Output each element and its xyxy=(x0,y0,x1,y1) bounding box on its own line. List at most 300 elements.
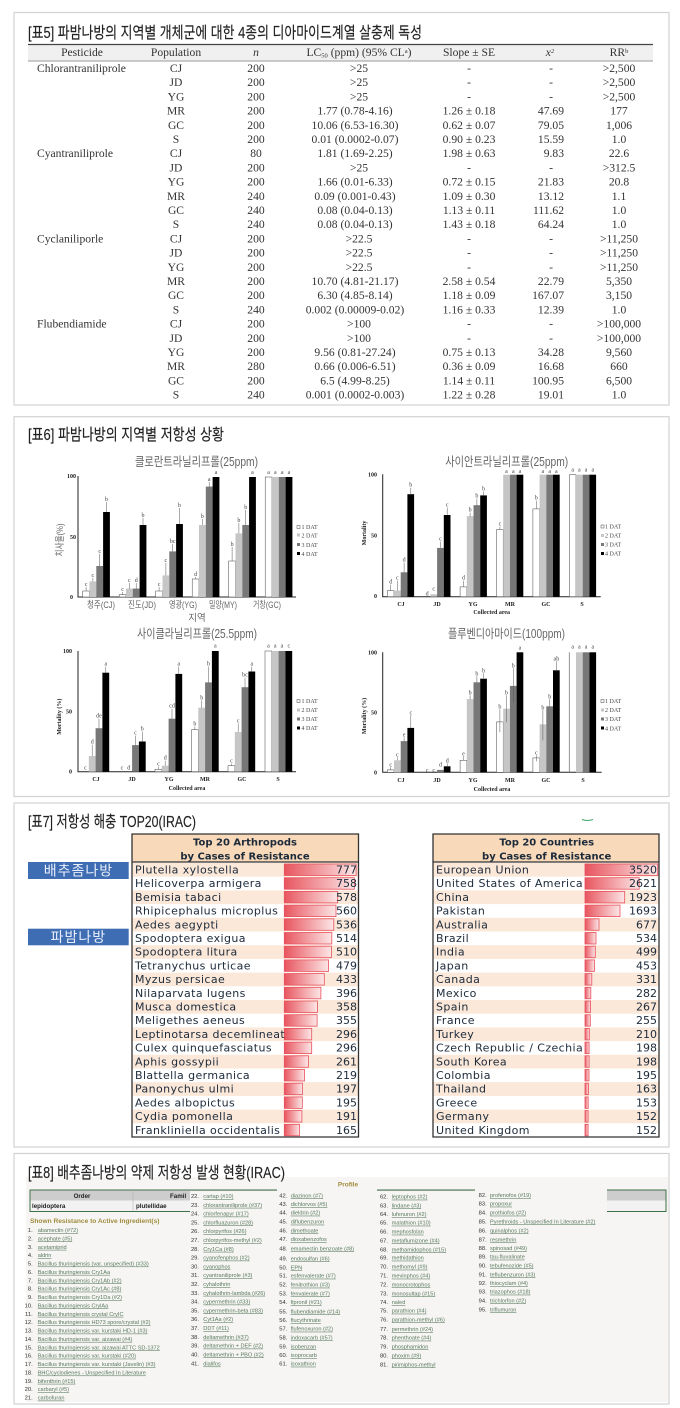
table header: Pesticide xyxy=(61,46,103,59)
chart: chlorantraniliprole: c xyxy=(158,582,161,588)
list column 4: 78. xyxy=(380,1336,388,1342)
screenshot background xyxy=(26,1177,668,1402)
chart: chlorantraniliprole: c xyxy=(128,578,131,584)
table rows: >100 xyxy=(347,332,371,345)
list column 5: 94. xyxy=(479,1298,487,1304)
table rows: 64.24 xyxy=(538,218,564,231)
names and counts xyxy=(435,864,657,1137)
table rows: 0.66 (0.006-6.51) xyxy=(314,360,396,373)
list column 2: 24. xyxy=(191,1212,199,1218)
chart: cyclaniliprole: c xyxy=(237,719,240,725)
chart: chlorantraniliprole: b xyxy=(244,505,247,511)
table rows: 34.28 xyxy=(538,346,564,359)
names and counts: China xyxy=(436,891,469,904)
chart: chlorantraniliprole: 청주(CJ) xyxy=(87,600,115,611)
names and counts: 195 xyxy=(336,1096,357,1109)
list column 1: Bacillus thuringiensis HD73 spore/crystal (#2) xyxy=(38,1320,151,1326)
table: top 20 arthropods: Top 20 Arthropods xyxy=(193,838,297,848)
list column 2: cyhalothrin-lambda (#26) xyxy=(203,1291,265,1297)
table rows: >25 xyxy=(350,76,368,89)
names and counts: 210 xyxy=(636,1028,657,1041)
list column 2: dialifos xyxy=(203,1362,221,1368)
table rows: GC xyxy=(168,119,184,132)
names and counts: 355 xyxy=(336,1014,357,1027)
table rows: YG xyxy=(168,90,185,103)
chart: cyantraniliprole: S xyxy=(580,602,584,608)
table: top 20 arthropods: by Cases of Resistance xyxy=(180,852,310,862)
list column 4: 79. xyxy=(380,1344,388,1350)
list column 4: phoxim (#9) xyxy=(392,1353,421,1359)
chart: cyclaniliprole: c xyxy=(121,766,124,772)
list column 5: tau-fluvalinate xyxy=(490,1255,525,1261)
list column 2: cypermethrin-beta (#83) xyxy=(203,1308,263,1314)
chart: chlorantraniliprole: a xyxy=(208,477,211,483)
table rows: 47.69 xyxy=(538,105,564,118)
names and counts: Aphis gossypii xyxy=(135,1055,219,1068)
names and counts: Colombia xyxy=(436,1069,491,1082)
table rows: 0.01 (0.0002-0.07) xyxy=(312,133,399,146)
names and counts: Plutella xylostella xyxy=(135,864,239,876)
table rows: 111.62 xyxy=(533,204,564,217)
list column 2: deltamethrin (#37) xyxy=(203,1335,249,1341)
list column 2: deltamethrin + PBO (#2) xyxy=(203,1352,264,1358)
list column 4: lufenuron (#2) xyxy=(392,1212,427,1218)
names and counts: 777 xyxy=(336,864,357,876)
names and counts: 3520 xyxy=(629,864,657,876)
chart: cyclaniliprole: a xyxy=(177,662,180,668)
names and counts: 758 xyxy=(336,877,357,890)
list column 4: 71. xyxy=(380,1274,388,1280)
list column 1: Bacillus thuringiensis var. kurstaki (#20) xyxy=(38,1354,136,1360)
chart: flubendiamide: a xyxy=(591,644,594,650)
names and counts: Tetranychus urticae xyxy=(134,959,251,972)
list column 3: flubendiamide (#14) xyxy=(291,1309,340,1315)
label: diamondback moth xyxy=(28,862,129,879)
chart: cyantraniliprole: b xyxy=(475,494,478,500)
chart: chlorantraniliprole: b xyxy=(178,503,181,509)
table rows: 240 xyxy=(247,389,265,402)
legend: 1 DAT xyxy=(605,524,622,530)
table rows: - xyxy=(467,161,471,174)
table rows: >11,250 xyxy=(600,261,638,274)
chart: cyantraniliprole: CJ xyxy=(397,602,405,608)
list column 3 xyxy=(279,1193,354,1368)
table rows: MR xyxy=(167,360,185,373)
legend: 3 DAT xyxy=(605,717,622,723)
chart: chlorantraniliprole: b xyxy=(141,513,144,519)
names and counts: Czech Republic / Czechia xyxy=(436,1042,583,1055)
table rows: - xyxy=(467,247,471,260)
list column 3: flucythrinate xyxy=(291,1318,321,1324)
table rows: 1.77 (0.78-4.16) xyxy=(317,105,393,118)
chart: chlorantraniliprole: b xyxy=(201,514,204,520)
list column 5: spinosad (#49) xyxy=(490,1246,527,1252)
list column 3: indoxacarb (#57) xyxy=(291,1335,333,1341)
chart: cyantraniliprole: b xyxy=(482,487,485,493)
label: diamondback moth: 배추좀나방 xyxy=(44,862,113,878)
chart: cyantraniliprole xyxy=(362,455,622,616)
table rows: 177 xyxy=(610,105,628,118)
chart: chlorantraniliprole: 50 xyxy=(70,535,76,541)
table rows: CJ xyxy=(170,232,183,245)
table rows: 240 xyxy=(247,204,265,217)
table: top 20 countries: by Cases of Resistance xyxy=(482,852,612,862)
legend: 2 DAT xyxy=(605,534,622,540)
list column 2: 35. xyxy=(191,1308,199,1314)
list column 5 xyxy=(479,1193,596,1313)
list column 4: lindane (#3) xyxy=(392,1203,421,1209)
list column 4: 63. xyxy=(380,1203,388,1209)
table rows: 200 xyxy=(247,90,265,103)
legend: 4 DAT xyxy=(302,726,318,732)
heading: table 7: [표7] 저항성 해충 TOP20(IRAC) xyxy=(28,813,196,831)
list column 3: esfenvalerate (#7) xyxy=(291,1274,336,1280)
list column 2: chlorfenapyr (#17) xyxy=(203,1212,249,1218)
legend: 3 DAT xyxy=(302,717,318,723)
table rows: 1.81 (1.69-2.25) xyxy=(317,147,393,160)
table rows: CJ xyxy=(170,62,183,75)
list column 2: 27. xyxy=(191,1238,199,1244)
list column 2: 31. xyxy=(191,1273,199,1279)
list column 3: 56. xyxy=(279,1318,288,1324)
chart: cyantraniliprole: c xyxy=(439,537,442,543)
table rows: 200 xyxy=(247,247,265,260)
chart: cyclaniliprole: c xyxy=(230,759,233,765)
list column 3: 51. xyxy=(279,1274,288,1280)
table rows: 1.0 xyxy=(612,389,626,402)
list column 5: teflubenzuron (#3) xyxy=(490,1272,536,1278)
order family table: Famil xyxy=(170,1193,186,1200)
table rows: >22.5 xyxy=(346,247,373,260)
chart: cyantraniliprole: c xyxy=(446,503,449,509)
list column 3: 43. xyxy=(279,1202,288,1208)
chart: flubendiamide: a xyxy=(519,645,522,651)
chart: flubendiamide: Collected area xyxy=(474,787,510,793)
list column 5: 84. xyxy=(479,1211,487,1217)
data bars xyxy=(284,864,356,1136)
table: top 20 countries: Top 20 Countries xyxy=(499,838,594,848)
chart: flubendiamide: e xyxy=(403,732,406,738)
chart: flubendiamide: a xyxy=(585,644,588,650)
chart: flubendiamide: b xyxy=(541,705,544,711)
table rows: >25 xyxy=(350,62,368,75)
chart: flubendiamide: S xyxy=(581,778,585,784)
list column 5: 87. xyxy=(479,1237,487,1243)
table rows: 0.72 ± 0.15 xyxy=(443,176,496,189)
names and counts: 267 xyxy=(636,1000,657,1014)
list column 2: cyanophos xyxy=(203,1264,231,1270)
names and counts: 152 xyxy=(636,1124,657,1137)
list column 2: cyanofenphos (#2) xyxy=(203,1256,250,1262)
list column 3: 42. xyxy=(279,1193,288,1199)
chart: chlorantraniliprole: 밀양(MY) xyxy=(209,599,237,611)
chart: cyantraniliprole: Collected area xyxy=(473,610,510,616)
panel: table 5 toxicity xyxy=(14,12,669,405)
green mark xyxy=(582,820,593,821)
names and counts: Bemisia tabaci xyxy=(135,891,222,904)
list column 1: abamectin (#72) xyxy=(38,1228,78,1234)
table rows: JD xyxy=(170,247,182,260)
chart: flubendiamide: 100 xyxy=(368,650,377,656)
table header: n xyxy=(253,46,259,59)
list column 1: 19. xyxy=(25,1379,33,1385)
names and counts: Frankliniella occidentalis xyxy=(135,1124,280,1137)
list column 2: chlorpyrifos-methyl (#2) xyxy=(203,1238,262,1244)
list column 4: 76. xyxy=(380,1317,388,1323)
list column 5: triflumuron xyxy=(490,1307,516,1313)
table rows: CJ xyxy=(170,147,183,160)
names and counts: Blattella germanica xyxy=(135,1069,250,1082)
names and counts: Cydia pomonella xyxy=(135,1110,233,1123)
table rows: - xyxy=(467,261,471,274)
list column 3: 44. xyxy=(279,1211,288,1217)
heading: table 8: [표8] 배추좀나방의 약제 저항성 발생 현황(IRAC) xyxy=(28,1164,285,1182)
heading: table 5: [표5] 파밤나방의 지역별 개체군에 대한 4종의 디아마이드계열 살충제 독성 xyxy=(28,24,422,42)
list column 4: leptophos (#2) xyxy=(392,1195,428,1201)
legend: 2 DAT xyxy=(302,708,318,714)
list column 1: carbaryl (#5) xyxy=(38,1387,69,1393)
chart: chlorantraniliprole: 100 xyxy=(67,474,76,480)
list column 1: 3. xyxy=(28,1245,33,1251)
legend: 3 DAT xyxy=(605,542,622,548)
chart: flubendiamide: b xyxy=(498,704,501,710)
list column 3: 52. xyxy=(279,1283,288,1289)
names and counts: 198 xyxy=(636,1042,657,1055)
names and counts: Nilaparvata lugens xyxy=(135,987,246,1000)
list column 3: flufenoxuron (#2) xyxy=(291,1327,333,1333)
panel: table 8 resistance list xyxy=(14,1154,669,1404)
order family table: Order xyxy=(74,1193,91,1200)
table rows: 0.08 (0.04-0.13) xyxy=(317,204,393,217)
table rows: 79.05 xyxy=(538,119,564,132)
list column 2: 36. xyxy=(191,1317,199,1323)
names and counts: Culex quinquefasciatus xyxy=(135,1042,272,1055)
names and counts: France xyxy=(436,1014,475,1027)
names and counts: 163 xyxy=(636,1083,657,1096)
chart: flubendiamide: JD xyxy=(433,778,441,784)
chart: chlorantraniliprole: c xyxy=(165,558,168,564)
table rows: - xyxy=(467,232,471,245)
table rows: 200 xyxy=(247,62,265,75)
table header: (ppm) (95% CL xyxy=(328,46,405,59)
names and counts: Australia xyxy=(436,918,488,931)
list column 1: 12. xyxy=(25,1320,33,1326)
table rows: 200 xyxy=(247,261,265,274)
list column 1: 4. xyxy=(28,1253,33,1259)
chart: flubendiamide: b xyxy=(505,690,508,696)
chart: cyclaniliprole: a xyxy=(214,644,217,650)
list column 5: 82. xyxy=(479,1193,487,1199)
names and counts: 514 xyxy=(336,932,357,945)
chart: flubendiamide: 0 xyxy=(374,770,377,776)
chart: cyclaniliprole: cd xyxy=(169,704,175,710)
list column 4: parathion (#4) xyxy=(392,1309,427,1315)
table header: a xyxy=(405,48,408,55)
list column 1: acetamiprid xyxy=(38,1245,67,1251)
chart: chlorantraniliprole: a xyxy=(274,470,277,476)
table rows: 9,560 xyxy=(606,346,632,359)
table rows: 200 xyxy=(247,289,265,302)
list column 2: Cry1Ca (#8) xyxy=(203,1247,234,1253)
chart: cyclaniliprole: bc xyxy=(242,673,248,679)
chart: flubendiamide: b xyxy=(548,694,551,700)
list column 1: 11. xyxy=(25,1312,33,1318)
chart: cyantraniliprole: a xyxy=(548,469,551,475)
list column 1: acephate (#5) xyxy=(38,1236,72,1242)
table header: LC xyxy=(306,46,321,59)
list column 5: tebufenozide (#5) xyxy=(490,1263,534,1269)
list column 4: 74. xyxy=(380,1300,388,1306)
table rows: 22.6 xyxy=(609,147,629,160)
names and counts: Brazil xyxy=(436,932,469,945)
table rows: 100.95 xyxy=(532,374,564,387)
list column 3: EPN xyxy=(291,1265,302,1271)
list column 1: 8. xyxy=(28,1287,33,1293)
list column 5: thiocyclam (#4) xyxy=(490,1281,528,1287)
chart: cyantraniliprole: c xyxy=(499,522,502,528)
names and counts xyxy=(134,864,357,1137)
table rows: YG xyxy=(168,261,185,274)
table rows: - xyxy=(467,62,471,75)
names and counts: 153 xyxy=(636,1096,657,1109)
list column 1: 10. xyxy=(25,1303,33,1309)
chart: cyantraniliprole: MR xyxy=(505,602,516,608)
chart: flubendiamide: d xyxy=(446,758,449,764)
table rows: 1.0 xyxy=(612,303,626,316)
list column 2: deltamethrin + DEF (#2) xyxy=(203,1344,263,1350)
table rows: GC xyxy=(168,204,184,217)
list column 1: 9. xyxy=(28,1295,33,1301)
chart: cyantraniliprole: d xyxy=(462,576,465,582)
table rows: 1.98 ± 0.63 xyxy=(443,147,496,160)
list column 1: 7. xyxy=(28,1278,33,1284)
order family table: plutellidae xyxy=(136,1203,167,1210)
table rows: 0.002 (0.00009-0.02) xyxy=(306,303,404,316)
names and counts: Aedes aegypti xyxy=(135,918,219,931)
order family table: lepidoptera xyxy=(32,1203,66,1210)
list column 2: cyantraniliprole (#3) xyxy=(203,1273,253,1279)
chart: chlorantraniliprole: 거창(GC) xyxy=(253,600,281,611)
list column 3: fipronil (#21) xyxy=(291,1300,322,1306)
table rows: >100,000 xyxy=(597,318,641,331)
chart: flubendiamide: b xyxy=(512,663,515,669)
table rows: YG xyxy=(168,176,185,189)
list column 1: Bacillus thuringiensis Cry1Aa xyxy=(38,1270,111,1276)
table rows: >2,500 xyxy=(603,90,636,103)
table header: b xyxy=(625,48,628,55)
list column 4: 68. xyxy=(380,1247,388,1253)
chart: flubendiamide: Mortality (%) xyxy=(361,698,368,734)
names and counts: Aedes albopictus xyxy=(135,1096,235,1109)
chart: flubendiamide: YG xyxy=(468,778,478,784)
chart: chlorantraniliprole: 클로란트라닐리프롤(25ppm) xyxy=(135,455,258,469)
list column 1: 17. xyxy=(25,1362,33,1368)
list column 4: methidathion xyxy=(392,1256,424,1262)
list column 1: BHC/cyclodienes - Unspecified In Literature xyxy=(38,1370,146,1376)
table rows: 200 xyxy=(247,133,265,146)
list column 5: 93. xyxy=(479,1290,487,1296)
chart: flubendiamide: CJ xyxy=(397,778,405,784)
table rows: 10.06 (6.53-16.30) xyxy=(312,119,399,132)
list column 1: 14. xyxy=(25,1337,33,1343)
table: top 20 arthropods xyxy=(132,834,358,1137)
table rows: 1.16 ± 0.33 xyxy=(443,303,496,316)
list column 3: fenvalerate (#7) xyxy=(291,1291,330,1297)
table rows: Cyantraniliprole xyxy=(37,147,113,160)
list column 4: 73. xyxy=(380,1291,388,1297)
table rows: 200 xyxy=(247,119,265,132)
chart: chlorantraniliprole: a xyxy=(281,470,284,476)
chart: cyclaniliprole: Mortality (%) xyxy=(56,699,63,735)
list column 5: 88. xyxy=(479,1246,487,1252)
list column 4 xyxy=(380,1195,446,1368)
list column 3: 48. xyxy=(279,1246,288,1252)
names and counts: Meligethes aeneus xyxy=(135,1014,245,1027)
list column 4: 62. xyxy=(380,1195,388,1201)
chart: cyantraniliprole: 50 xyxy=(371,534,377,540)
names and counts: 578 xyxy=(336,891,357,904)
chart: chlorantraniliprole: a xyxy=(267,470,270,476)
names and counts: Japan xyxy=(435,959,469,972)
list column 3: dieldrin (#2) xyxy=(291,1211,320,1217)
data bars xyxy=(585,864,658,1136)
chart: cyclaniliprole: a xyxy=(104,662,107,668)
list column 4: 70. xyxy=(380,1265,388,1271)
chart: cyclaniliprole: d xyxy=(127,766,130,772)
list column 3: 61. xyxy=(279,1362,288,1368)
list column 4: monosultap (#15) xyxy=(392,1291,435,1297)
table rows: 9.83 xyxy=(544,147,564,160)
chart: cyantraniliprole: 100 xyxy=(368,472,377,478)
table rows: - xyxy=(549,247,553,260)
list column 2: 30. xyxy=(191,1264,199,1270)
table rows: 6,500 xyxy=(606,374,632,387)
list column 3: 54. xyxy=(279,1300,288,1306)
list column 3: 58. xyxy=(279,1335,288,1341)
chart: cyclaniliprole: a xyxy=(267,644,270,650)
list column 2: 40. xyxy=(191,1352,199,1358)
names and counts: 2621 xyxy=(629,877,657,890)
chart: flubendiamide: 50 xyxy=(371,710,377,716)
list column 5: triazophos (#18) xyxy=(490,1290,531,1296)
chart: flubendiamide: e xyxy=(462,751,465,757)
chart: flubendiamide: b xyxy=(469,690,472,696)
names and counts: United Kingdom xyxy=(436,1124,530,1137)
names and counts: 560 xyxy=(336,905,357,918)
legend xyxy=(601,699,622,732)
table rows: JD xyxy=(170,161,182,174)
chart: chlorantraniliprole: a xyxy=(251,470,254,476)
list column 2: 39. xyxy=(191,1344,199,1350)
chart: chlorantraniliprole: a xyxy=(288,470,291,476)
list column 2: cypermethrin (#33) xyxy=(203,1300,250,1306)
names and counts: 479 xyxy=(336,959,357,972)
chart: cyclaniliprole: 0 xyxy=(69,770,72,776)
list column 1: Bacillus thuringiensis var. aizawai (#4) xyxy=(38,1337,132,1343)
table rows: - xyxy=(467,332,471,345)
list column 4: metaflumizone (#4) xyxy=(392,1238,440,1244)
names and counts: Spodoptera litura xyxy=(135,946,238,959)
chart: cyclaniliprole: d xyxy=(91,740,94,746)
list column 4: mevinphos (#4) xyxy=(392,1274,430,1280)
list column 3: dichlorvos (#5) xyxy=(291,1202,328,1208)
table rows: 200 xyxy=(247,346,265,359)
list column 2: 26. xyxy=(191,1229,199,1235)
names and counts: 191 xyxy=(336,1110,357,1123)
table rows: 1.43 ± 0.18 xyxy=(443,218,496,231)
chart: cyantraniliprole: 0 xyxy=(374,594,377,600)
list column 3: isobenzan xyxy=(291,1344,316,1350)
